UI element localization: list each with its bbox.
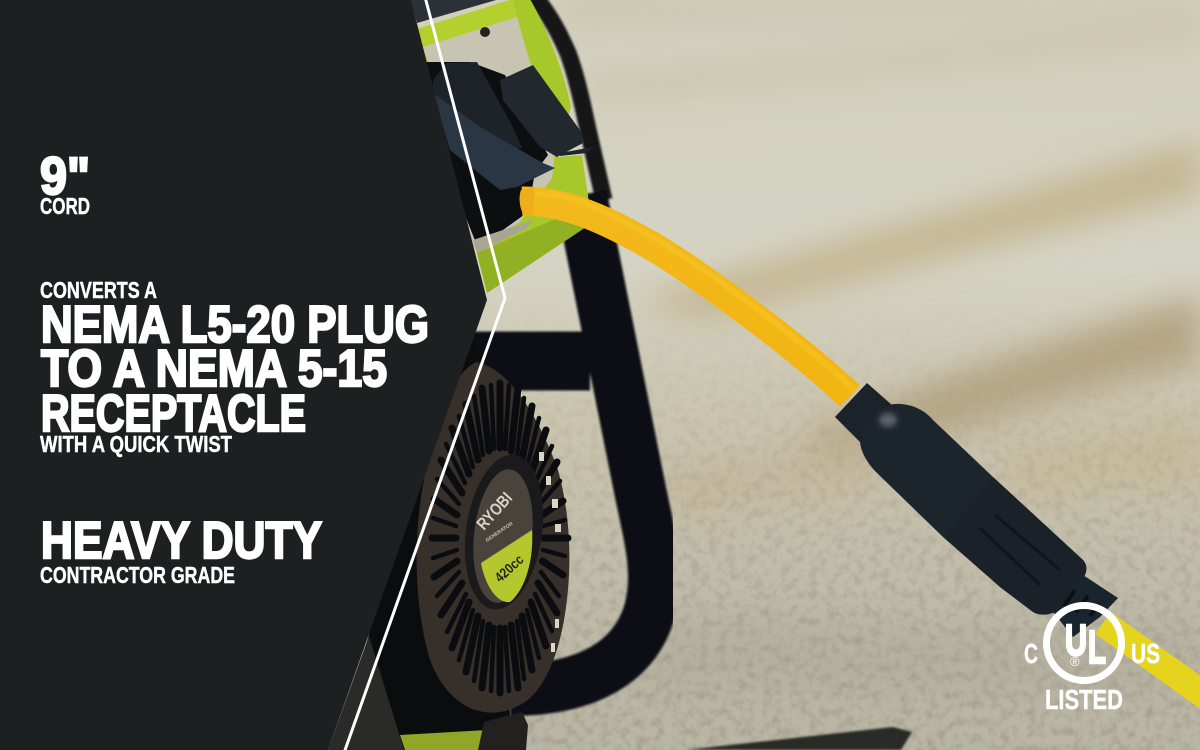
UL listed certification logo: C: [1024, 638, 1038, 669]
generator tube frame: [470, 0, 654, 690]
UL listed certification logo: LISTED: [1045, 684, 1123, 715]
UL listed certification logo: US: [1131, 638, 1160, 669]
generator control panel: [410, 0, 592, 293]
spec: 9 inch cord: 9": [40, 147, 90, 206]
white chevron line: [344, 0, 505, 750]
dark mass behind the fan: [340, 335, 510, 750]
UL listed certification logo: [1024, 606, 1160, 715]
fan slots: [432, 383, 568, 693]
recoil starter fan cover: [417, 362, 569, 713]
fan hub badge: [456, 449, 552, 615]
photo background: sandy ground: [336, 0, 1200, 750]
UL listed certification logo: L: [1088, 621, 1106, 673]
spec: NEMA conversion: TO A NEMA 5-15: [41, 340, 387, 398]
fan hub badge: 420cc: [491, 551, 527, 585]
UL listed certification logo: ®: [1070, 654, 1080, 669]
spec: NEMA conversion: NEMA L5-20 PLUG: [41, 296, 429, 354]
spec: 9 inch cord: CORD: [40, 193, 90, 219]
dark text panel: [0, 0, 487, 750]
fan hub badge: RYOBI: [473, 489, 516, 534]
light gaps between right-hand slots: [539, 452, 561, 652]
spec: NEMA conversion: RECEPTACLE: [41, 385, 306, 443]
fan hub badge: GENERATOR: [485, 521, 515, 544]
black plug connector: [835, 383, 1118, 637]
lower generator body block: [400, 712, 528, 750]
UL listed certification logo: U: [1065, 616, 1087, 665]
spec: heavy duty: [40, 512, 322, 588]
spec: heavy duty: HEAVY DUTY: [41, 512, 322, 570]
yellow power cord: [520, 187, 855, 396]
grey lower corner wedge: [328, 636, 404, 750]
spec: NEMA conversion: [40, 277, 429, 457]
far side of yellow cord: [1103, 623, 1200, 699]
spec: NEMA conversion: CONVERTS A: [40, 277, 157, 303]
spec: heavy duty: CONTRACTOR GRADE: [40, 562, 235, 588]
spec: NEMA conversion: WITH A QUICK TWIST: [40, 431, 232, 457]
plugged receptacle covers: [433, 62, 593, 190]
